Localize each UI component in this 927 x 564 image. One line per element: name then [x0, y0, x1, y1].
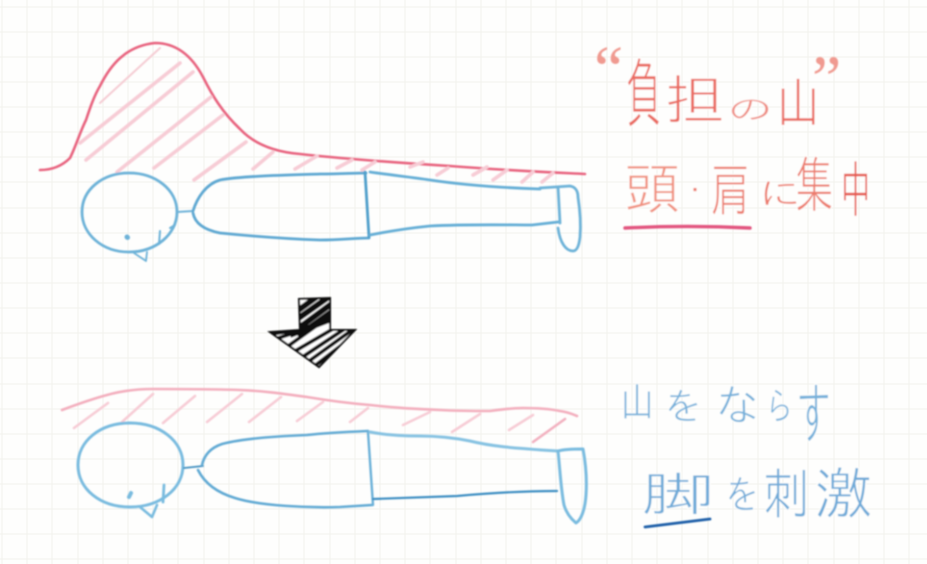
heading: load mountain with quotes: 負 — [625, 51, 662, 138]
heading: load mountain with quotes — [594, 33, 841, 138]
text: concentrated on head and shoulders: 肩 — [710, 159, 750, 224]
text: stimulate the legs: 脚 — [641, 468, 715, 522]
text: flatten the mountain: な — [715, 382, 759, 431]
text: stimulate the legs: を — [724, 474, 760, 518]
text: flatten the mountain: を — [663, 387, 703, 429]
underline: red — [625, 226, 750, 228]
heading: load mountain with quotes: 担 — [665, 72, 725, 131]
bottom body figure lying down — [78, 423, 586, 523]
underline: blue — [645, 519, 710, 527]
text: flatten the mountain: ら — [765, 387, 793, 429]
text: stimulate the legs — [641, 463, 873, 527]
text: stimulate the legs: 激 — [814, 464, 873, 527]
bottom flattened load mountain with hatching — [62, 389, 577, 442]
arrow: downward hand-shaded — [270, 296, 356, 368]
text: stimulate the legs: 刺 — [763, 463, 810, 526]
heading: load mountain with quotes: 山 — [776, 72, 820, 135]
closing quote: ” — [812, 43, 841, 116]
text: concentrated on head and shoulders: 頭 — [624, 159, 681, 221]
text: concentrated on head and shoulders: に — [758, 177, 802, 212]
heading: load mountain with quotes: の — [727, 94, 773, 127]
text: flatten the mountain — [620, 377, 832, 452]
opening quote: “ — [594, 33, 623, 106]
top body figure lying down — [82, 172, 580, 261]
text: concentrated on head and shoulders — [624, 152, 871, 226]
text: flatten the mountain: 山 — [620, 381, 654, 427]
text: concentrated on head and shoulders: ・ — [680, 175, 710, 208]
text: flatten the mountain: す — [796, 377, 832, 452]
text: concentrated on head and shoulders: 中 — [840, 155, 871, 226]
text: concentrated on head and shoulders: 集 — [795, 152, 834, 220]
top load mountain with hatching — [40, 43, 585, 182]
